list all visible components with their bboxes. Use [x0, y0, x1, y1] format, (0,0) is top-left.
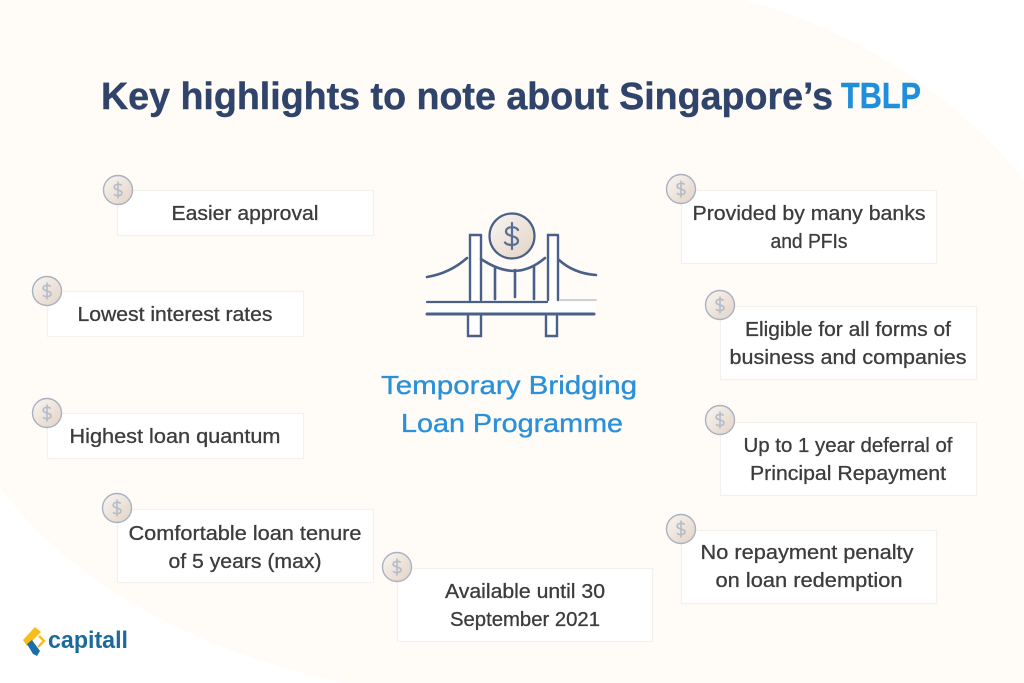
card: Highest loan quantum — [32, 398, 304, 458]
card: No repayment penalty: No repayment penalty — [700, 542, 914, 564]
icon: dollar coin — [490, 214, 534, 258]
card: Comfortable loan tenure — [102, 494, 374, 582]
card: Deferral — [706, 406, 976, 496]
icon: bridge with dollar coin — [427, 214, 596, 337]
card: Available until — [382, 552, 652, 642]
card: Provided by many banks: and PFIs — [770, 231, 848, 253]
card: Available until: September 2021 — [450, 609, 600, 631]
card: Comfortable loan tenure: Comfortable loan tenure — [128, 523, 362, 545]
logo: capitall: capitall — [48, 627, 128, 654]
card: Eligible: Eligible for all forms of — [745, 319, 951, 341]
card: Easier approval — [104, 176, 374, 236]
card: Eligible — [706, 290, 976, 380]
card: No repayment penalty: on loan redemption — [716, 570, 902, 592]
card: Available until: Available until 30 — [445, 581, 605, 603]
card: Eligible: business and companies — [730, 347, 966, 369]
card: Deferral: Principal Repayment — [750, 463, 946, 485]
title: Key highlights to note about Singapore’s — [101, 76, 833, 118]
card: Lowest interest rates: Lowest interest rates — [78, 304, 272, 326]
card: Deferral: Up to 1 year deferral of — [744, 435, 953, 457]
center label: Loan Programme — [401, 408, 623, 438]
card: Lowest interest rates — [32, 276, 304, 336]
card: Highest loan quantum: Highest loan quantum — [70, 426, 280, 448]
card: No repayment penalty — [666, 514, 936, 604]
logo: capitall — [23, 627, 128, 656]
card: Provided by many banks — [666, 174, 936, 264]
card: Easier approval: Easier approval — [172, 203, 318, 225]
center label — [381, 370, 637, 438]
card: Provided by many banks: Provided by many banks — [692, 203, 926, 225]
center label: Temporary Bridging — [381, 370, 637, 400]
card: Comfortable loan tenure: of 5 years (max) — [168, 551, 322, 573]
title: TBLP — [841, 75, 921, 116]
